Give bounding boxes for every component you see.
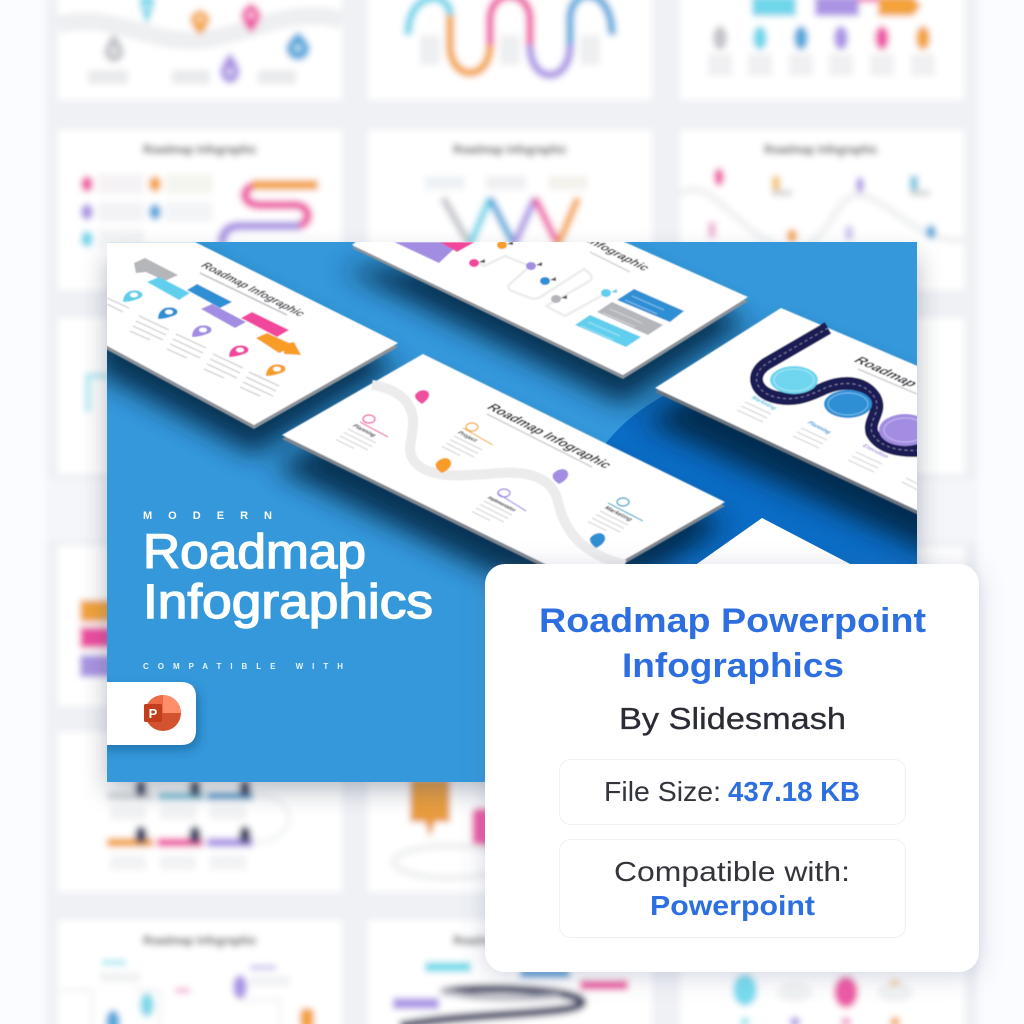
slide: dark asphalt road xyxy=(654,307,917,515)
chip: PowerPoint logo xyxy=(100,682,196,745)
slide: partly hidden bottom slide xyxy=(697,518,850,564)
icon: PowerPoint: P xyxy=(149,706,158,721)
slide: curved grey road xyxy=(282,354,725,587)
step labels xyxy=(737,396,922,490)
title: Roadmap Infographics: Roadmap xyxy=(143,526,366,579)
thumbnail row 2: Roadmap Infographic xyxy=(453,141,567,157)
road xyxy=(372,385,625,565)
ribbon steps xyxy=(134,258,301,355)
thumbnail row 4 xyxy=(58,546,964,706)
thumbnail row 1 xyxy=(58,0,964,100)
step labels: Planning xyxy=(805,421,833,435)
thumbnail row 3 xyxy=(46,318,978,540)
description lines xyxy=(107,298,279,396)
thumbnail row 6: Roadmap Infographic xyxy=(143,932,257,948)
thumbnail row 2: Roadmap Infographic xyxy=(143,141,257,157)
thumbnail row 2 xyxy=(58,130,964,290)
step: Project xyxy=(442,423,493,457)
box: file size: 437.18 KB xyxy=(728,776,860,807)
slide: connected path roadmap xyxy=(352,242,748,380)
label: COMPATIBLE WITH: COMPATIBLE WITH xyxy=(143,662,343,671)
step labels: Marketing xyxy=(749,396,779,411)
title: Roadmap Infographics xyxy=(143,526,433,629)
eyebrow: MODERN: MODERN xyxy=(143,510,272,522)
step labels: Execution xyxy=(860,444,890,459)
slide title: Roadmap xyxy=(850,355,922,389)
slide: stepped arrow roadmap xyxy=(100,242,398,429)
box: file size: File Size: xyxy=(604,776,721,807)
asphalt road xyxy=(756,328,925,450)
panel: info card xyxy=(485,564,979,972)
title: Roadmap Infographics: Infographics xyxy=(143,576,433,629)
slide title: Roadmap Infographic xyxy=(532,210,654,273)
slide shadows xyxy=(107,251,917,590)
step: Implementation: Implementation xyxy=(485,496,517,513)
panel: main blue cover xyxy=(107,242,917,782)
byline: By Slidesmash xyxy=(619,701,846,736)
slide title: Roadmap Infographic xyxy=(197,261,310,318)
step: Project: Project xyxy=(455,431,480,443)
step: Marketing xyxy=(588,498,643,532)
colored blocks xyxy=(394,242,684,347)
box: compatibility xyxy=(560,840,906,938)
thumbnail row 5 xyxy=(58,732,964,892)
milestone circles xyxy=(770,366,931,446)
path outline xyxy=(476,256,610,316)
box: file size xyxy=(560,760,906,824)
block text lines xyxy=(581,296,664,340)
thumbnail row 2: Roadmap Infographic xyxy=(764,141,878,157)
dark blue curved area xyxy=(606,396,917,564)
step: Planning: Planning xyxy=(350,424,378,438)
slide title: Roadmap Infographic xyxy=(483,402,617,470)
location pins xyxy=(123,290,286,376)
step: Marketing: Marketing xyxy=(602,506,634,522)
path pins xyxy=(469,241,617,303)
main card shadow xyxy=(107,256,917,790)
step: Planning xyxy=(336,415,388,450)
heading: Roadmap Powerpoint Infographics: Roadmap Powerpoint xyxy=(539,602,926,640)
thumbnail row 6: Roadmap Infographic xyxy=(453,932,567,948)
step: Implementation xyxy=(472,489,526,522)
box: compatibility: Powerpoint xyxy=(650,890,815,921)
box: compatibility: Compatible with: xyxy=(614,856,850,887)
heading: Roadmap Powerpoint Infographics: Infographics xyxy=(622,647,844,685)
road pins xyxy=(415,390,605,548)
heading: Roadmap Powerpoint Infographics xyxy=(539,602,926,685)
thumbnail row 6 xyxy=(58,920,964,1024)
